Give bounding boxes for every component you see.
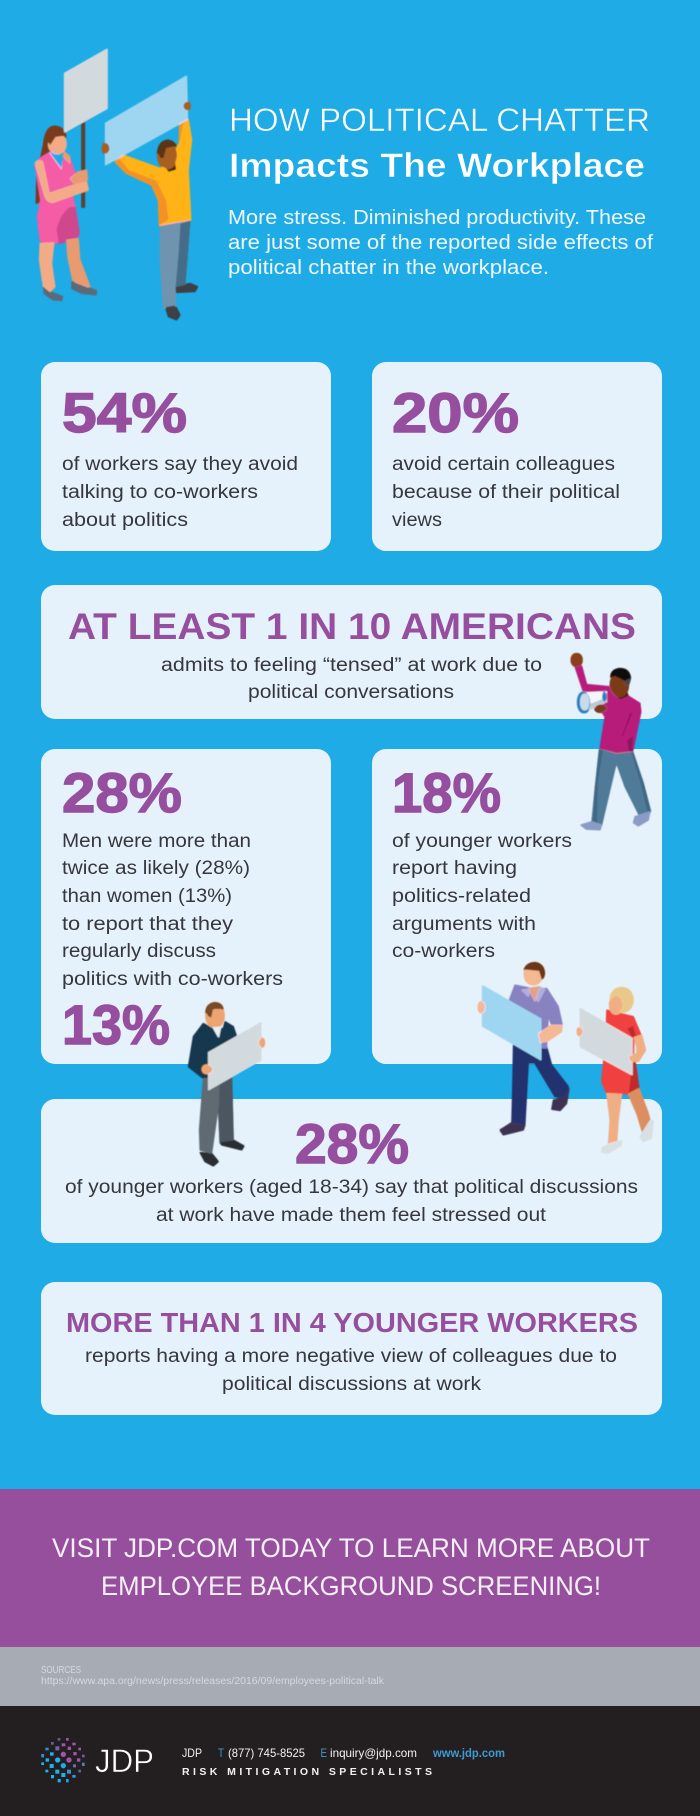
header: title and intro [228, 102, 653, 279]
text block: 20% detail: because of their political [392, 482, 620, 503]
panel: men 28% and women 13%: 13% [62, 993, 170, 1056]
text block: 18% detail: co-workers [392, 941, 495, 962]
text block: men vs women: to report that they [62, 914, 234, 935]
text block: 54% detail: about politics [62, 510, 188, 531]
text block: 54% detail: talking to co-workers [62, 482, 258, 503]
title: Impacts The Workplace [229, 147, 645, 185]
sources band [0, 1647, 700, 1706]
intro text [228, 207, 653, 279]
panel: 28% younger workers stressed: 28% [295, 1112, 409, 1175]
panel: 20%: 20% [392, 381, 519, 444]
panel: men 28% and women 13% [41, 749, 331, 1064]
panel: 28% younger workers stressed [41, 1099, 662, 1243]
text block: negative view [85, 1346, 617, 1395]
footer [0, 1706, 700, 1816]
text block: 20% detail [392, 454, 620, 531]
text block: men vs women: Men were more than [62, 831, 251, 852]
text block: men vs women: politics with co-workers [62, 969, 283, 990]
panel: more than 1 in 4 younger workers: MORE THAN 1 IN 4 YOUNGER WORKERS [66, 1307, 638, 1338]
panel: at least 1 in 10 Americans [41, 585, 662, 719]
contact details [182, 1746, 505, 1778]
title [229, 102, 650, 185]
title: HOW POLITICAL CHATTER [229, 102, 650, 138]
intro text: are just some of the reported side effects of [228, 232, 653, 254]
contact details: T [218, 1746, 225, 1760]
text block: men vs women: regularly discuss [62, 941, 216, 962]
text block: negative view: political discussions at work [222, 1374, 482, 1395]
panel: 54% [41, 362, 331, 551]
call to action band [0, 1489, 700, 1647]
illustration: two people holding signs [35, 49, 198, 320]
illustration: couple holding signs [478, 962, 653, 1153]
panel: 18% [372, 749, 662, 1064]
text block: men vs women: twice as likely (28%) [62, 858, 250, 879]
call to action band: EMPLOYEE BACKGROUND SCREENING! [101, 1571, 601, 1601]
text block: 18% detail: of younger workers [392, 831, 572, 852]
illustration: man with megaphone [571, 653, 651, 830]
text block: 18% detail: politics-related [392, 886, 531, 907]
footer: JDP [95, 1743, 154, 1779]
panel: 20% [372, 362, 662, 551]
panel: 18%: 18% [392, 761, 501, 824]
text block: stressed out: of younger workers (aged 18-34) say that political discussions [65, 1177, 638, 1198]
text block: stressed out [65, 1177, 638, 1226]
text block: 18% detail [392, 831, 572, 962]
text block: stressed out: at work have made them feel stressed out [156, 1205, 547, 1226]
panel: 54%: 54% [62, 381, 187, 444]
icon: JDP logo dots [41, 1738, 85, 1782]
intro text: More stress. Diminished productivity. These [228, 207, 646, 229]
call to action band: VISIT JDP.COM TODAY TO LEARN MORE ABOUT [52, 1533, 650, 1563]
text block: 20% detail: avoid certain colleagues [392, 454, 615, 475]
sources band: SOURCES [41, 1665, 81, 1676]
text block: 18% detail: arguments with [392, 914, 536, 935]
contact details: www.jdp.com [432, 1746, 505, 1760]
text block: tensed at work [161, 655, 542, 703]
contact details: JDP [182, 1746, 202, 1760]
contact details: (877) 745-8525 [228, 1746, 305, 1760]
text block: men vs women [62, 831, 283, 990]
contact details: inquiry@jdp.com [330, 1746, 417, 1760]
text block: negative view: reports having a more negative view of colleagues due to [85, 1346, 617, 1367]
sources band: https://www.apa.org/news/press/releases/2016/09/employees-political-talk [41, 1676, 385, 1687]
illustration: man holding sign [188, 1002, 265, 1166]
text block: 20% detail: views [392, 510, 442, 531]
intro text: political chatter in the workplace. [228, 257, 549, 279]
panel: men 28% and women 13%: 28% [62, 761, 182, 824]
text block: tensed at work: political conversations [248, 682, 454, 703]
panel: more than 1 in 4 younger workers [41, 1282, 662, 1415]
text block: 18% detail: report having [392, 858, 517, 879]
text block: 54% detail [62, 454, 298, 531]
contact details: RISK MITIGATION SPECIALISTS [182, 1766, 432, 1778]
text block: men vs women: than women (13%) [62, 886, 232, 907]
text block: 54% detail: of workers say they avoid [62, 454, 298, 475]
panel: at least 1 in 10 Americans: AT LEAST 1 IN 10 AMERICANS [68, 606, 636, 647]
contact details: E [320, 1746, 327, 1760]
text block: tensed at work: admits to feeling “tensed” at work due to [161, 655, 542, 676]
